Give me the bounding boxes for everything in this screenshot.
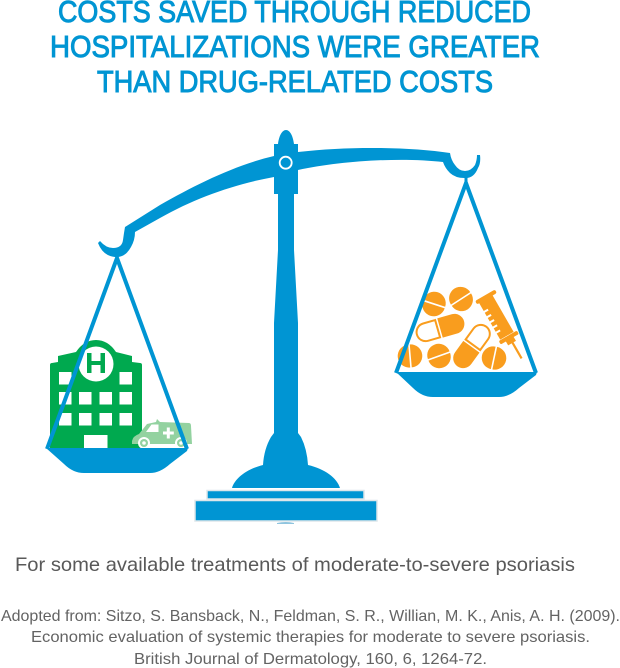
right pan <box>396 176 537 397</box>
citation: British Journal of Dermatology, 160, 6, 1264-72. <box>134 651 487 668</box>
capsule: horizontal <box>414 311 467 344</box>
title: THAN DRUG-RELATED COSTS <box>97 64 493 99</box>
title: HOSPITALIZATIONS WERE GREATER <box>50 29 540 64</box>
left pan <box>46 258 188 473</box>
column head <box>274 130 298 194</box>
citation: Economic evaluation of systemic therapies for moderate to severe psoriasis. <box>31 629 590 646</box>
subtitle: For some available treatments of moderate-to-severe psoriasis <box>15 554 575 576</box>
citation: Adopted from: Sitzo, S. Bansback, N., Feldman, S. R., Willian, M. K., Anis, A. H. (2009). <box>1 608 620 625</box>
scale <box>98 130 480 524</box>
tablets <box>397 282 508 372</box>
capsule: diagonal <box>449 321 494 372</box>
icon: medicines <box>397 282 531 372</box>
base steps <box>207 490 364 499</box>
citation <box>1 608 620 668</box>
syringe <box>475 290 531 364</box>
icon: hospital <box>50 340 142 448</box>
title <box>50 0 540 99</box>
column and base <box>232 194 340 488</box>
icon: ambulance <box>132 419 192 449</box>
beam <box>98 148 480 257</box>
pivot <box>280 157 292 169</box>
